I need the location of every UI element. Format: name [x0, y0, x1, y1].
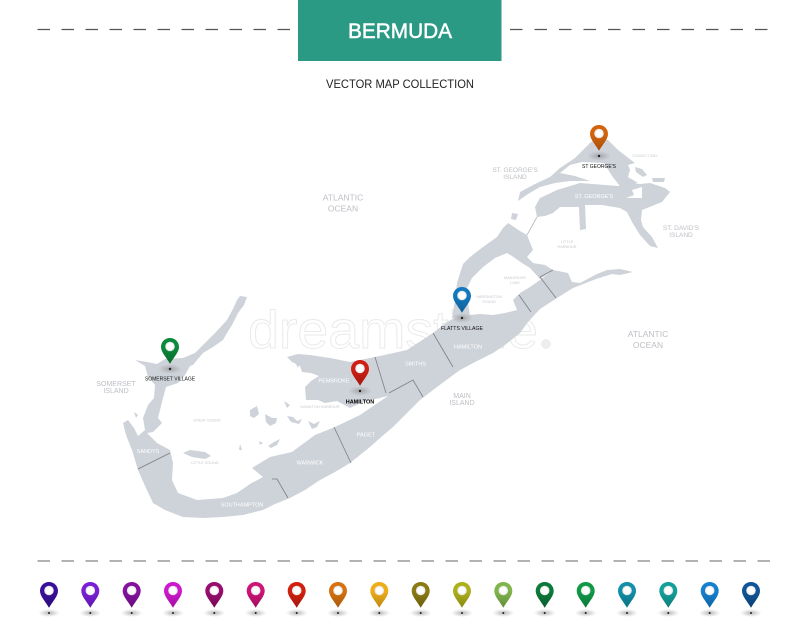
- pin 8: [327, 582, 349, 617]
- location pin: Hamilton: HAMILTON: [346, 400, 374, 406]
- parish labels: SOUTHAMPTON: [221, 502, 263, 508]
- pin 7: [286, 582, 308, 617]
- title: BERMUDA: [348, 19, 453, 43]
- water feature labels: MANGROVE: [504, 276, 527, 280]
- region labels: oceans and islands: SOMERSET: [96, 381, 136, 388]
- region labels: oceans and islands: ST. GEORGE'S: [492, 167, 538, 174]
- region labels: oceans and islands: ST. DAVID'S: [663, 225, 700, 232]
- map of Bermuda: [123, 138, 670, 518]
- region labels: oceans and islands: [96, 167, 700, 407]
- region labels: oceans and islands: ISLAND: [103, 388, 129, 395]
- parish labels: ST. GEORGE'S: [575, 194, 613, 200]
- pin 18: [740, 582, 762, 617]
- water feature labels: LAKE: [510, 281, 520, 285]
- pin 2: [79, 582, 101, 617]
- water feature labels: HAMILTON HARBOUR: [300, 405, 340, 409]
- pin 13: [534, 582, 556, 617]
- pin 4: [162, 582, 184, 617]
- pin 11: [451, 582, 473, 617]
- region labels: oceans and islands: ISLAND: [449, 400, 475, 407]
- location pin: Flatts Village: [441, 287, 484, 332]
- water feature labels: GREAT SOUND: [193, 418, 221, 422]
- region labels: oceans and islands: ATLANTIC: [323, 192, 363, 202]
- water feature labels: HARBOUR: [558, 245, 577, 249]
- pin 15: [616, 582, 638, 617]
- region labels: oceans and islands: MAIN: [453, 393, 471, 400]
- pin 16: [657, 582, 679, 617]
- land: southern mainland with Somerset: [123, 269, 633, 518]
- water feature labels: HARRINGTON: [476, 295, 502, 299]
- parish labels: [137, 194, 613, 508]
- land: St George's north strip: [518, 138, 638, 201]
- pin 3: [121, 582, 143, 617]
- water feature labels: [191, 154, 658, 465]
- pin 1: [38, 582, 60, 617]
- pin 17: [699, 582, 721, 617]
- location pin: Flatts Village: FLATTS VILLAGE: [441, 326, 484, 332]
- land: St George's ring: [535, 183, 670, 248]
- subtitle: VECTOR MAP COLLECTION: [326, 77, 474, 91]
- header banner: [298, 0, 502, 61]
- water feature labels: LITTLE: [561, 240, 574, 244]
- location pin: St George's: [582, 125, 617, 170]
- pin 12: [492, 582, 514, 617]
- pin 14: [575, 582, 597, 617]
- water feature labels: CONVICT BAY: [632, 154, 658, 158]
- parish labels: HAMILTON: [454, 344, 482, 350]
- location pin: Hamilton: [346, 360, 374, 406]
- region labels: oceans and islands: OCEAN: [633, 340, 663, 350]
- land: small islands: [134, 167, 665, 459]
- region labels: oceans and islands: ISLAND: [503, 174, 527, 181]
- region labels: oceans and islands: ATLANTIC: [628, 329, 668, 339]
- parish labels: WARWICK: [297, 460, 324, 466]
- region labels: oceans and islands: ISLAND: [669, 232, 693, 239]
- harbour cut-outs: [626, 187, 642, 198]
- parish borders: [138, 217, 556, 498]
- watermark: dreamstime: [248, 301, 538, 360]
- pin 9: [368, 582, 390, 617]
- pin 5: [203, 582, 225, 617]
- pin 10: [410, 582, 432, 617]
- location pin: St George's: ST GEORGE'S: [582, 164, 617, 170]
- water feature labels: LITTLE SOUND: [191, 461, 219, 465]
- pin colour legend row: [38, 582, 762, 617]
- location pin: Somerset Village: [145, 338, 196, 382]
- pin 6: [245, 582, 267, 617]
- region labels: oceans and islands: OCEAN: [328, 204, 358, 214]
- land: Hamilton parish north lobe: [452, 223, 553, 318]
- water feature labels: SOUND: [482, 300, 496, 304]
- parish labels: SANDYS: [137, 449, 160, 455]
- location pin: Somerset Village: SOMERSET VILLAGE: [145, 376, 196, 382]
- parish labels: PAGET: [357, 432, 376, 438]
- parish labels: PEMBROKE: [318, 378, 350, 384]
- parish labels: SMITHS: [405, 362, 426, 368]
